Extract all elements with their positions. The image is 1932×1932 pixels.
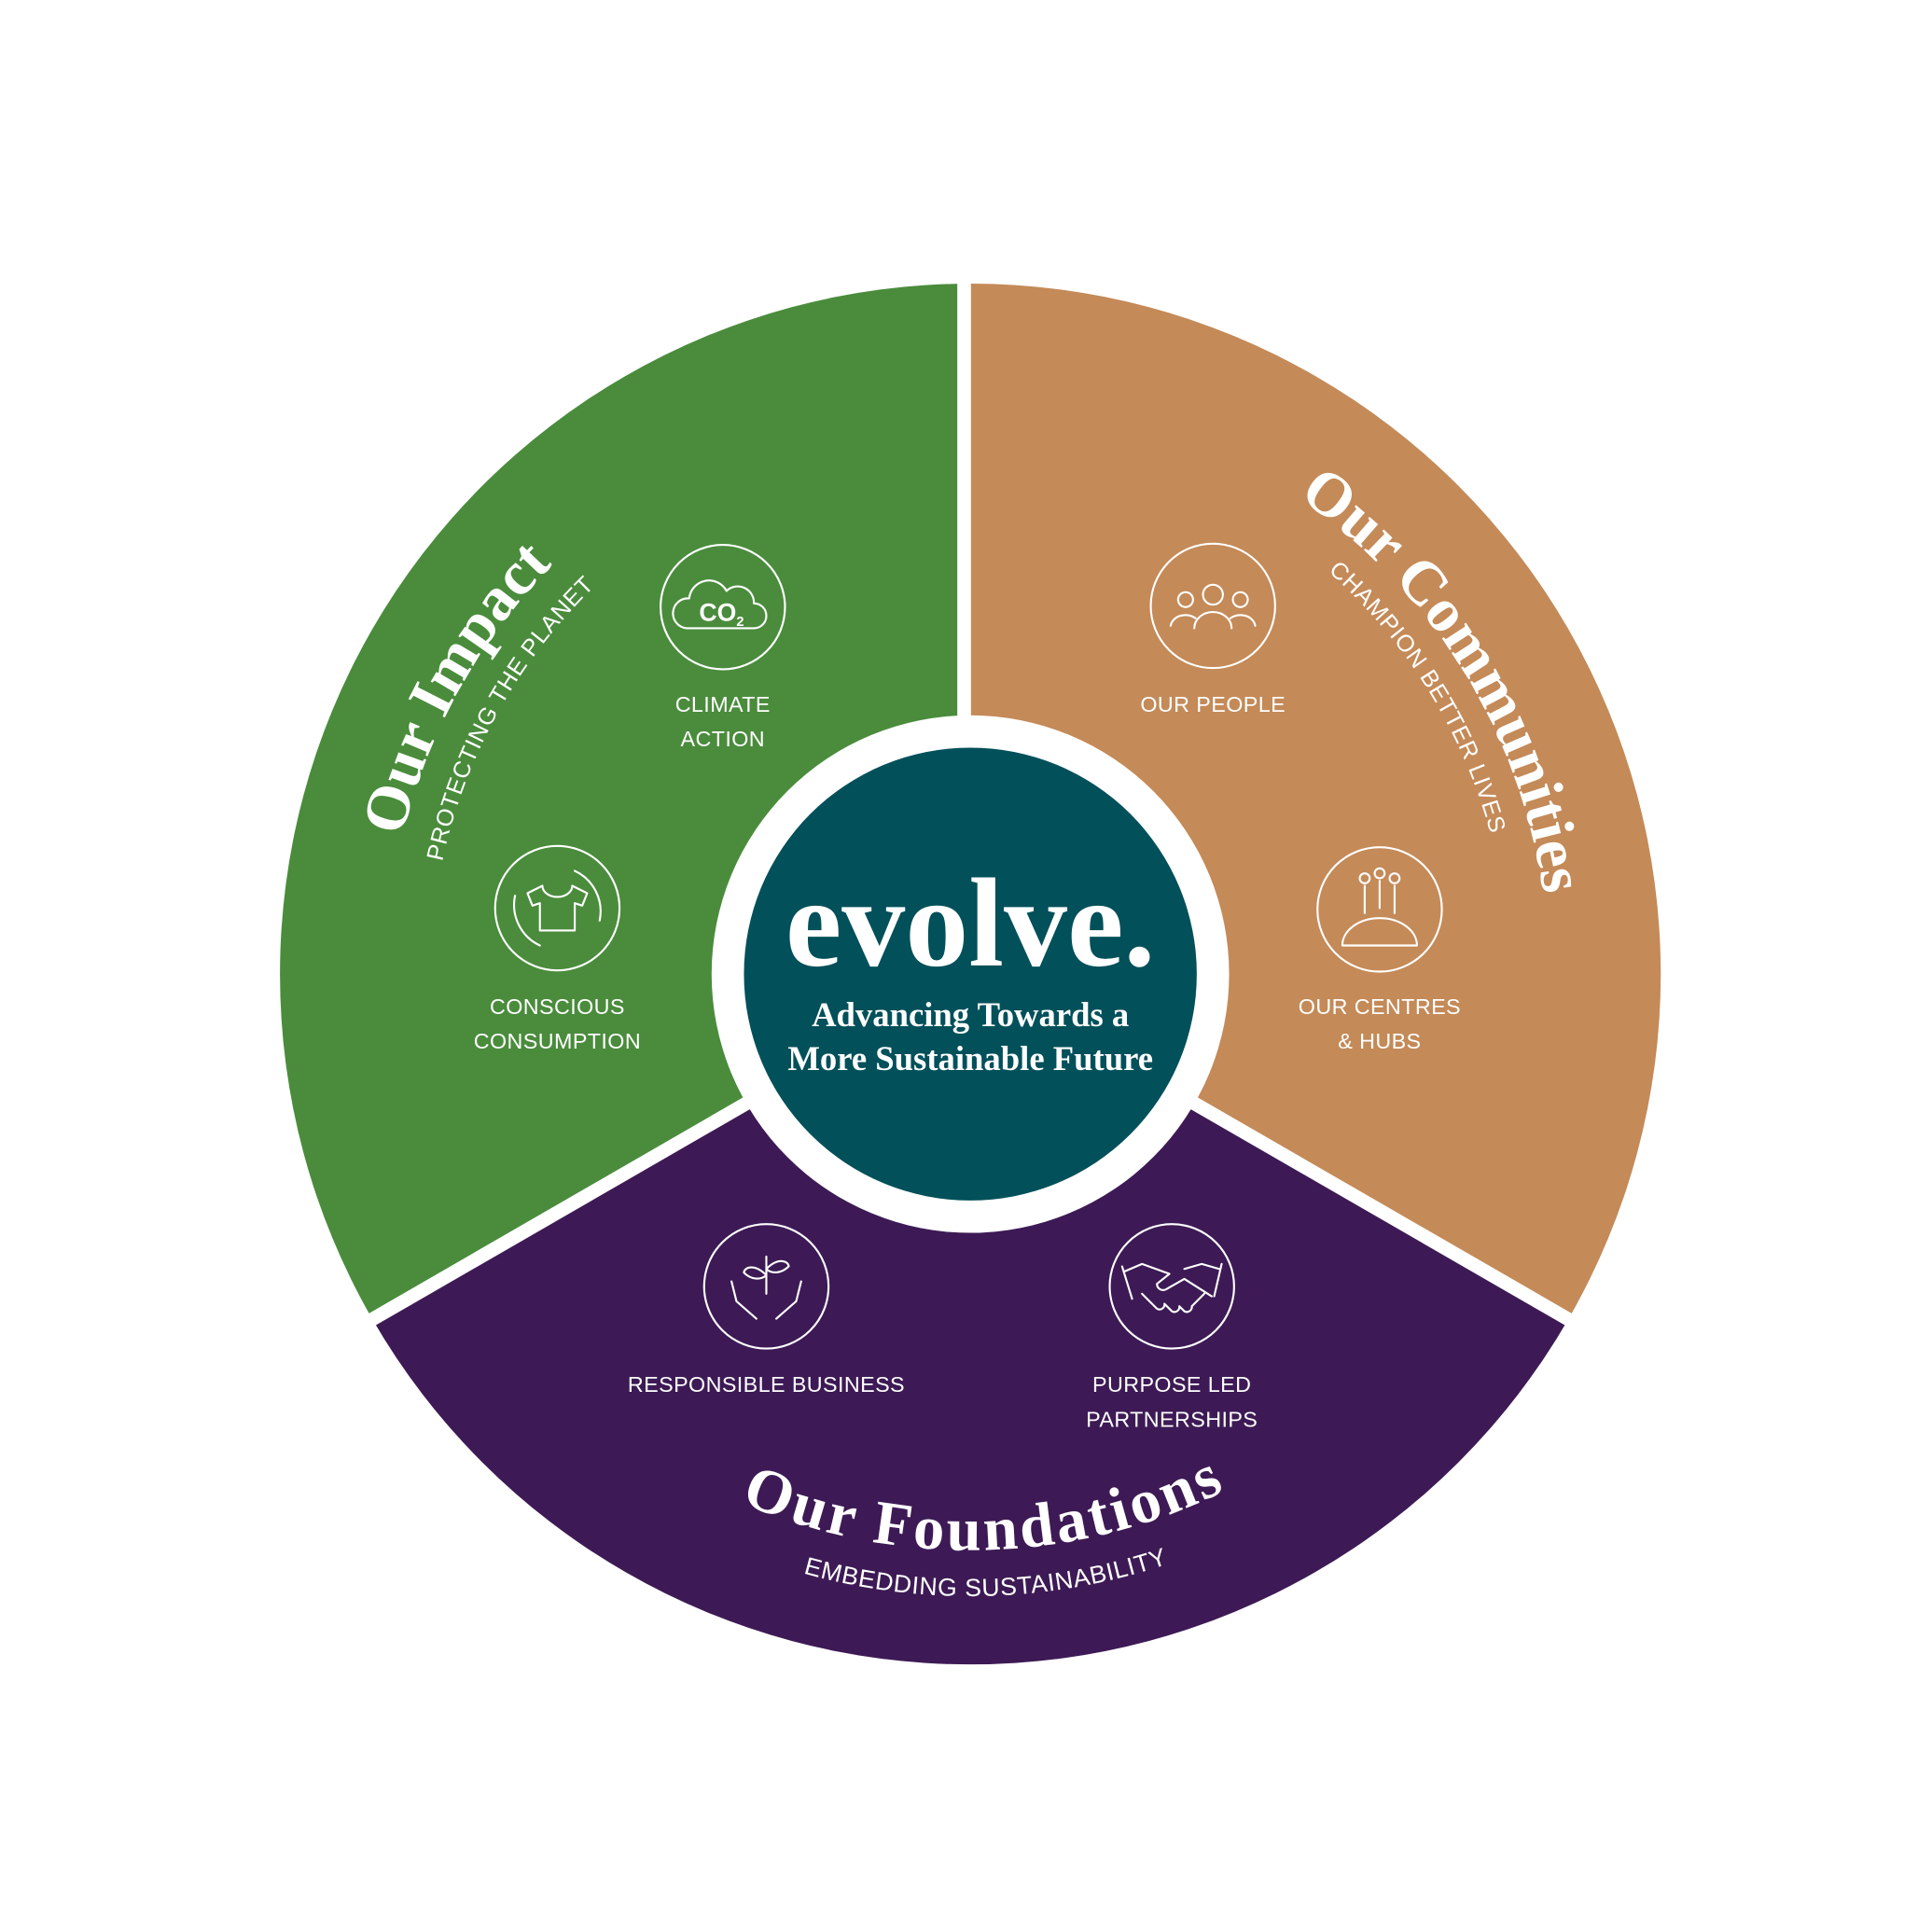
icon: people [1151, 544, 1275, 668]
heading: Our Foundations: Our Foundations [748, 1466, 1221, 1550]
label: purpose led partnerships: PURPOSE LED [1092, 1372, 1251, 1397]
icon: globe with people [1317, 847, 1442, 972]
tagline: More Sustainable Future [787, 1039, 1153, 1077]
subheading: embedding sustainability: EMBEDDING SUSTAINABILITY [805, 1548, 1162, 1597]
panel: our impact (green sector) [280, 284, 970, 1319]
label: our centres & hubs: OUR CENTRES [1299, 994, 1461, 1019]
icon: hands with plant [704, 1224, 828, 1349]
icon: t-shirt recycle [495, 846, 619, 970]
icon: CO2 cloud [660, 545, 785, 669]
tagline: Advancing Towards a [812, 995, 1129, 1034]
icon: CO2 cloud: CO [699, 598, 736, 626]
label: conscious consumption: CONSUMPTION [474, 1029, 641, 1053]
center circle [712, 716, 1230, 1233]
icon: handshake [1110, 1224, 1234, 1349]
logo: evolve.: evolve. [785, 854, 1155, 994]
label: our centres & hubs: & HUBS [1338, 1029, 1422, 1053]
panel: our communities (tan sector) [970, 284, 1661, 1319]
label: responsible business: RESPONSIBLE BUSINESS [628, 1372, 905, 1397]
label: our people: OUR PEOPLE [1140, 692, 1286, 716]
label: conscious consumption: CONSCIOUS [490, 994, 625, 1019]
label: purpose led partnerships: PARTNERSHIPS [1086, 1408, 1258, 1432]
heading: Our Communities: Our Communities [1307, 472, 1575, 892]
icon: CO2 cloud: 2 [736, 615, 744, 630]
label: climate action: ACTION [681, 727, 765, 751]
subheading: protecting the planet: PROTECTING THE PLANET [427, 575, 591, 860]
label: climate action: CLIMATE [675, 692, 771, 716]
panel: our foundations (purple sector) [372, 974, 1568, 1664]
heading: Our Impact: Our Impact [368, 546, 552, 830]
subheading: champion better lives: CHAMPION BETTER LIVES [1332, 563, 1505, 832]
